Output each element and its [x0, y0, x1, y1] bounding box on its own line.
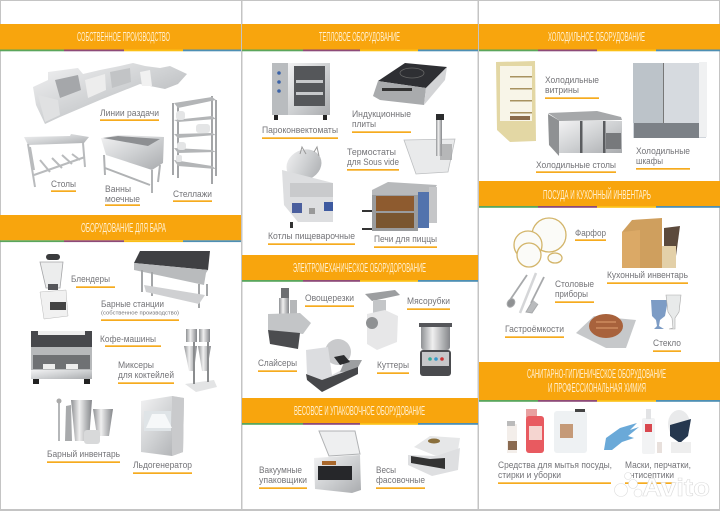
panel: thermal equipment	[242, 24, 478, 248]
label: porcelain: Фарфор	[575, 228, 606, 239]
icon: combi oven	[272, 63, 330, 120]
heading: refrigeration	[479, 24, 720, 51]
heading: thermal equipment: ТЕПЛОВОЕ ОБОРУДОВАНИЕ	[319, 30, 400, 44]
heading: bar equipment: ОБОРУДОВАНИЕ ДЛЯ БАРА	[81, 221, 166, 235]
label: tables: Столы	[51, 179, 76, 190]
label: sinks: моечные	[105, 194, 140, 205]
heading: thermal equipment	[242, 24, 478, 51]
icon: cutter	[419, 323, 452, 376]
label: cleaning products	[498, 460, 612, 484]
label: kettles: Котлы пищеварочные	[268, 231, 355, 242]
label: slicers	[258, 358, 297, 372]
label: glassware: Стекло	[653, 338, 681, 349]
label: racks: Стеллажи	[173, 189, 212, 200]
icon: cutting boards and knives	[622, 218, 680, 268]
icon: gastronorm with steak	[576, 314, 636, 348]
label: masks gloves antiseptics: антисептики	[625, 470, 674, 481]
label: cutlery: приборы	[555, 289, 588, 300]
icon: coffee machine	[31, 331, 92, 384]
label: display cases	[545, 75, 599, 99]
panel: own production	[0, 24, 241, 206]
label: cocktail mixers	[118, 360, 174, 384]
icon: scales	[408, 436, 460, 476]
label: blenders: Блендеры	[71, 274, 110, 285]
label: combi ovens: Пароконвектоматы	[262, 125, 338, 136]
heading: electromechanical equipment	[242, 255, 478, 282]
label: induction cookers: плиты	[352, 119, 376, 130]
label: vegetable cutters: Овощерезки	[305, 293, 354, 304]
label: sinks	[105, 184, 140, 206]
icon: glassware	[651, 295, 681, 329]
label: refrigerated tables: Холодильные столы	[536, 160, 616, 171]
label: scales	[376, 465, 425, 489]
panel: refrigeration	[479, 24, 720, 173]
heading: own production: СОБСТВЕННОЕ ПРОИЗВОДСТВО	[77, 30, 170, 44]
icon: meat grinder	[365, 290, 400, 350]
label: vacuum packers: упаковщики	[259, 475, 307, 486]
heading: weighing and packaging	[242, 398, 478, 425]
label: scales: фасовочные	[376, 475, 425, 486]
icon: refrigerated table	[548, 111, 622, 156]
icon: porcelain	[514, 218, 566, 267]
label: refrigerators: шкафы	[636, 156, 663, 167]
icon: cutlery	[506, 273, 544, 313]
heading: sanitary	[479, 362, 720, 402]
label: bar stations: Барные станции	[101, 299, 164, 310]
icon: bar tools	[56, 398, 113, 444]
icon: antiseptic	[642, 409, 662, 454]
panel: electromechanical equipment	[242, 255, 478, 392]
panel: dishes and kitchen inventory	[479, 181, 720, 352]
panel: bar equipment	[0, 215, 241, 474]
label: induction cookers: Индукционные	[352, 109, 411, 120]
label: cutters: Куттеры	[377, 360, 409, 371]
label: refrigerators: Холодильные	[636, 146, 690, 157]
label: sous vide: Термостаты	[347, 147, 396, 158]
panel: sanitary equipment and chemicals	[479, 362, 720, 502]
label: induction cookers	[352, 109, 411, 133]
heading: own production	[0, 24, 241, 51]
label: vacuum packers	[259, 465, 307, 489]
label: refrigerators	[636, 146, 690, 170]
panel: weighing and packaging	[242, 398, 478, 493]
label: cleaning products: Средства для мытья посуды,	[498, 460, 612, 471]
icon: boiling kettle	[281, 144, 333, 228]
label: cutlery	[555, 279, 594, 303]
icon: ice maker	[141, 396, 184, 456]
label: bar stations	[101, 299, 179, 321]
icon: racks	[173, 96, 216, 184]
icon: refrigerator	[633, 62, 707, 138]
icon: sous vide	[404, 114, 455, 174]
icon: vegetable cutter	[268, 288, 311, 349]
icon: gloves	[604, 423, 639, 450]
label: gastronorm containers: Гастроёмкости	[505, 324, 564, 335]
label: bar inventory: Барный инвентарь	[47, 449, 120, 460]
label: cocktail mixers: Миксеры	[118, 360, 154, 371]
icon: bar station	[134, 251, 210, 308]
label: scales: Весы	[376, 465, 396, 476]
heading: dishes	[479, 181, 720, 208]
label: cocktail mixers: для коктейлей	[118, 370, 174, 381]
label: kitchen inventory: Кухонный инвентарь	[607, 270, 688, 281]
icon: mixers	[184, 329, 217, 392]
label: ice maker: Льдогенератор	[133, 460, 192, 471]
label: sous vide	[347, 147, 399, 171]
icon: blender	[40, 254, 68, 319]
label: display cases: Холодильные	[545, 75, 599, 86]
icon: face mask	[668, 410, 691, 453]
icon: wash sinks	[101, 135, 164, 193]
watermark: Avito: Avito	[642, 474, 710, 502]
heading: weighing and packaging: ВЕСОВОЕ И УПАКОВОЧНОЕ ОБОРУДОВАНИЕ	[294, 404, 425, 418]
label: cleaning products: стирки и уборки	[498, 470, 561, 481]
label: serving lines: Линии раздачи	[100, 108, 159, 119]
label: masks gloves antiseptics: Маски, перчатки,	[625, 460, 691, 471]
label: masks gloves antiseptics	[625, 460, 691, 484]
heading: electromechanical equipment: ЭЛЕКТРОМЕХАНИЧЕСКОЕ ОБОРУДОРОВАНИЕ	[293, 261, 426, 275]
icon: pizza oven	[362, 182, 437, 231]
label: sous vide: для Sous vide	[347, 157, 399, 168]
icon: serving line	[33, 63, 187, 124]
label: slicers: Слайсеры	[258, 358, 297, 369]
label: pizza ovens: Печи для пиццы	[374, 234, 437, 245]
label: sinks: Ванны	[105, 184, 131, 195]
label: display cases: витрины	[545, 85, 579, 96]
label: cutlery: Столовые	[555, 279, 594, 290]
icon: vacuum packer	[314, 431, 361, 493]
icon: cleaning products	[507, 409, 587, 453]
label: vacuum packers: Вакуумные	[259, 465, 302, 476]
icon: table	[24, 134, 89, 187]
label: meat grinders: Мясорубки	[407, 296, 450, 307]
label: coffee machines: Кофе-машины	[100, 334, 156, 345]
label: bar stations: (собственное производство)	[101, 310, 179, 316]
icon: slicer	[306, 339, 362, 392]
heading: bar equipment	[0, 215, 241, 242]
icon: induction cooker	[373, 63, 447, 105]
watermark: Avito	[614, 472, 710, 502]
icon: display case	[496, 61, 536, 142]
